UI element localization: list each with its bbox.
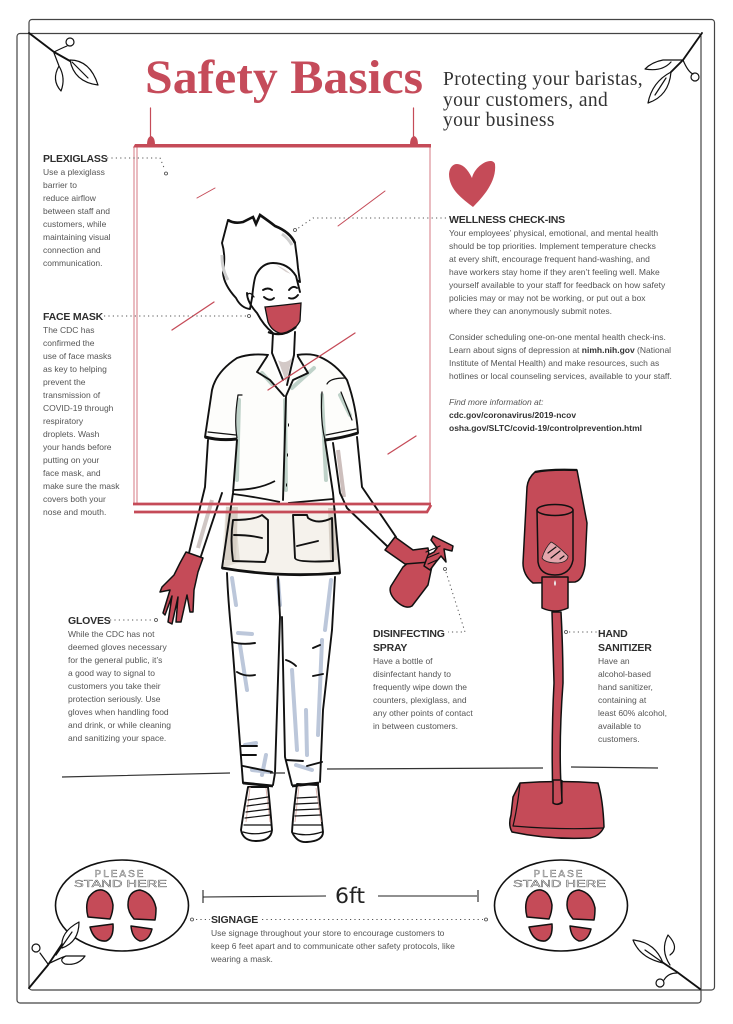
label: wellness check-ins: Your employees’ physical, emotional, and mental health [449,228,658,238]
corner leaves: top left [29,33,98,91]
label: wellness check-ins: should be top priorities. Implement temperature checks [449,241,656,251]
subtitle: your customers, and [443,90,608,111]
label: gloves: and sanitizing your space. [68,733,166,743]
label: plexiglass: customers, while [43,219,107,229]
label: gloves [68,615,171,743]
label: disinfecting spray: any other points of contact [373,708,473,718]
label: plexiglass: PLEXIGLASS [43,153,108,165]
corner leaves: bottom right [633,935,700,989]
arms [189,440,237,558]
label: face mask: covers both your [43,494,106,504]
label: disinfecting spray: Have a bottle of [373,656,433,666]
title: Safety Basics [145,51,423,104]
label: signage: keep 6 feet apart and to communicate other safety protocols, like [211,941,455,951]
label: face mask: make sure the mask [43,481,120,491]
label: plexiglass [43,153,168,268]
floor sign: right: STAND HERE [513,879,606,890]
label: gloves: a good way to signal to [68,668,155,678]
label: wellness check-ins: osha.gov/SLTC/covid-19/controlprevention.html [449,423,642,433]
bottom bars [133,504,431,512]
label: wellness check-ins: hotlines or local counseling services, available to your staff. [449,371,672,381]
label: hand sanitizer: customers. [598,734,640,744]
label: plexiglass: between staff and [43,206,110,216]
shirt [205,355,358,575]
label: gloves: deemed gloves necessary [68,642,168,652]
label: signage: SIGNAGE [211,914,258,926]
face [253,263,300,334]
hand sanitizer dispenser [510,470,604,838]
label: wellness check-ins: Consider scheduling one-on-one mental health check-ins. [449,332,666,342]
label: face mask: transmission of [43,390,101,400]
label: gloves: While the CDC has not [68,629,155,639]
label: plexiglass: Use a plexiglass [43,167,105,177]
label: hand sanitizer: hand sanitizer, [598,682,653,692]
label: disinfecting spray: counters, plexiglass, and [373,695,467,705]
floor sign: left: STAND HERE [74,879,167,890]
label: gloves: protection seriously. Use [68,694,161,704]
label: hand sanitizer: least 60% alcohol, [598,708,667,718]
label: face mask: COVID-19 through [43,403,114,413]
label: face mask: as key to helping [43,364,107,374]
corner leaves: bottom left [29,922,85,988]
heart icon [449,161,495,207]
subtitle: Protecting your baristas, [443,69,643,90]
label: wellness check-ins: Institute of Mental Health) and make resources, such as [449,358,659,368]
floor lines [62,767,658,777]
plexiglass panel [133,108,431,512]
label: hand sanitizer: alcohol-based [598,669,651,679]
label: face mask: use of face masks [43,351,112,361]
corner leaves: top right [645,33,702,103]
label: gloves: and drink, or while cleaning [68,720,171,730]
label: gloves: GLOVES [68,615,111,627]
label: signage [190,914,488,964]
label: hand sanitizer: HAND [598,628,628,640]
label: disinfecting spray: DISINFECTING [373,628,445,640]
label: face mask [43,311,250,517]
label: hand sanitizer: available to [598,721,641,731]
label: disinfecting spray [373,568,473,731]
label: hand sanitizer [564,628,667,744]
floor sign: right: PLEASE [534,869,584,880]
neck [268,333,297,392]
label: gloves: for the general public, it’s [68,655,162,665]
person figure [189,215,396,842]
label: face mask: respiratory [43,416,84,426]
label: disinfecting spray: frequently wipe down the [373,682,467,692]
label: disinfecting spray: SPRAY [373,642,407,654]
top bar [133,144,431,148]
label: face mask: The CDC has [43,325,94,335]
label: face mask: nose and mouth. [43,507,106,517]
label: hand sanitizer: Have an [598,656,630,666]
label: plexiglass: communication. [43,258,103,268]
label: wellness check-ins: have workers stay home if they aren’t feeling well. Make [449,267,660,277]
label: wellness check-ins: WELLNESS CHECK-INS [449,214,565,226]
label: gloves: customers you take their [68,681,161,691]
label: wellness check-ins: at every shift, encourage frequent hand-washing, and [449,254,650,264]
label: disinfecting spray: disinfectant handy to [373,669,451,679]
label: plexiglass: maintaining visual [43,232,111,242]
shoes [241,787,272,841]
label: face mask: face mask, and [43,468,101,478]
label: plexiglass: barrier to [43,180,77,190]
label: signage: wearing a mask. [210,954,273,964]
label: plexiglass: connection and [43,245,101,255]
hair [222,215,300,309]
label: wellness check-ins: yourself available to your staff for feedback on how safety [449,280,666,290]
label: hand sanitizer: containing at [598,695,647,705]
spray bottle and right glove [385,536,453,607]
label: signage: Use signage throughout your store to encourage customers to [211,928,445,938]
label: plexiglass: reduce airflow [43,193,97,203]
floor sign: left [56,860,188,951]
label: gloves: gloves when handling food [68,707,169,717]
label: face mask: putting on your [43,455,99,465]
label: wellness check-ins [294,214,672,433]
face mask [265,303,301,334]
label: face mask: droplets. Wash [43,429,100,439]
label: face mask: confirmed the [43,338,95,348]
pants [227,573,335,785]
floor sign: left: PLEASE [95,869,145,880]
plexiglass back edge [134,147,430,505]
label: hand sanitizer: SANITIZER [598,642,652,654]
label: wellness check-ins: where they can anonymously submit notes. [448,306,612,316]
reflections [197,188,385,226]
six foot distance marker: 6ft [335,884,365,908]
pockets [232,515,268,562]
label: face mask: your hands before [43,442,112,452]
label: wellness check-ins: Find more information at: [449,397,544,407]
six foot distance marker [203,884,478,908]
left glove [160,552,203,624]
label: face mask: prevent the [43,377,86,387]
label: disinfecting spray: in between customers. [373,721,458,731]
label: wellness check-ins: policies may or may not be working, or put out a box [449,293,646,303]
label: wellness check-ins: Learn about signs of depression at nimh.nih.gov (National [449,345,671,355]
floor sign: right [494,860,628,951]
hooks [150,108,414,137]
label: face mask: FACE MASK [43,311,104,323]
subtitle: your business [443,110,555,131]
label: wellness check-ins: cdc.gov/coronavirus/2019-ncov [449,410,576,420]
